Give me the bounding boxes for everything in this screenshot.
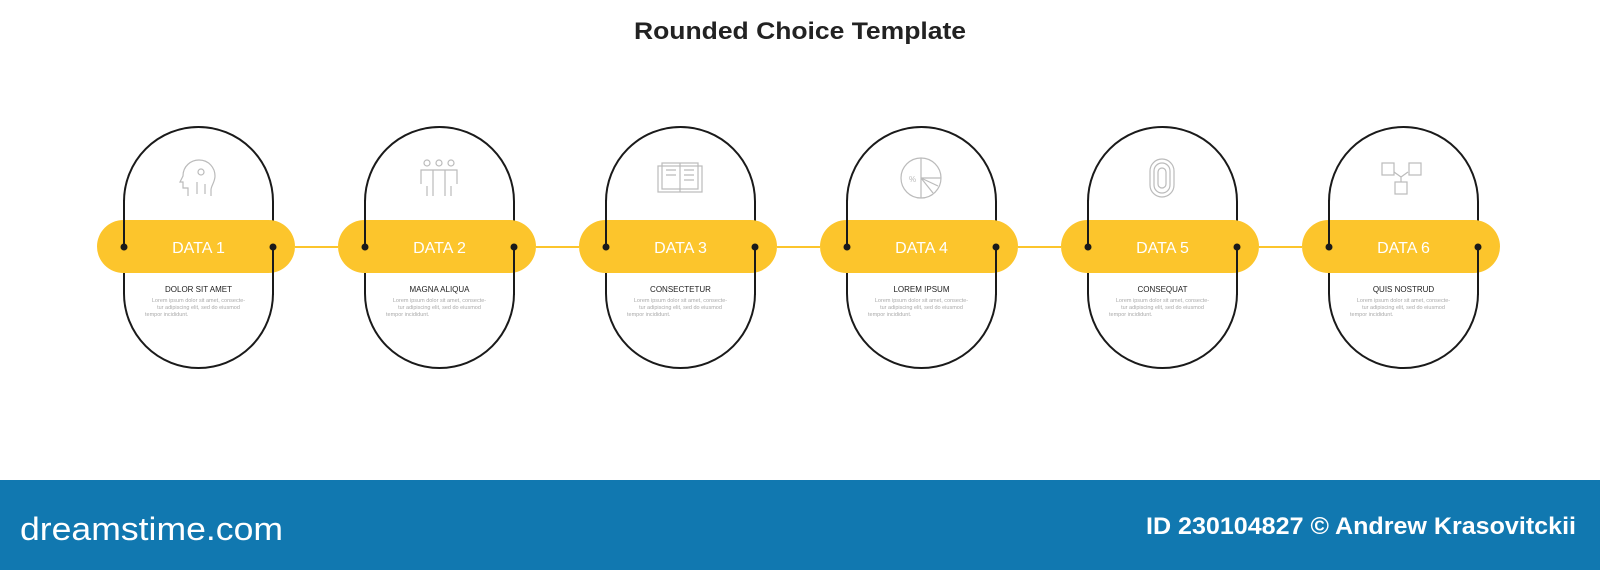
- icon: book: [658, 163, 702, 192]
- footer credit: ID 230104827 © Andrew Krasovitckii: [1146, 513, 1576, 540]
- step 4: [820, 127, 1018, 368]
- step 5: tempor incididunt.: [1109, 312, 1153, 318]
- step 3: tempor incididunt.: [627, 312, 671, 318]
- step 1: DATA 1: [172, 240, 225, 257]
- step 2: tempor incididunt.: [386, 312, 430, 318]
- step 2: Lorem ipsum dolor sit amet, consecte-: [393, 298, 486, 304]
- step 3: [579, 127, 777, 368]
- icon: fingerprint: [1150, 159, 1174, 197]
- step 5: CONSEQUAT: [1137, 285, 1188, 294]
- step 3: Lorem ipsum dolor sit amet, consecte-: [634, 298, 727, 304]
- step 1: [97, 127, 295, 368]
- step 3: CONSECTETUR: [650, 285, 711, 294]
- step 1: Lorem ipsum dolor sit amet, consecte-: [152, 298, 245, 304]
- step 5: Lorem ipsum dolor sit amet, consecte-: [1116, 298, 1209, 304]
- step 2: [338, 127, 536, 368]
- step 6: QUIS NOSTRUD: [1373, 285, 1434, 294]
- step 4: tempor incididunt.: [868, 312, 912, 318]
- step 6: tempor incididunt.: [1350, 312, 1394, 318]
- icon: cubes: [1382, 163, 1421, 194]
- step 6: Lorem ipsum dolor sit amet, consecte-: [1357, 298, 1450, 304]
- step 5: [1061, 127, 1259, 368]
- step 5: tur adipiscing elit, sed do eiusmod: [1121, 305, 1204, 311]
- step 4: LOREM IPSUM: [893, 285, 950, 294]
- step 3: tur adipiscing elit, sed do eiusmod: [639, 305, 722, 311]
- step 2: DATA 2: [413, 240, 466, 257]
- step 6: [1302, 127, 1500, 368]
- icon: people: [421, 160, 457, 196]
- step 2: MAGNA ALIQUA: [409, 285, 470, 294]
- step 4: Lorem ipsum dolor sit amet, consecte-: [875, 298, 968, 304]
- step 4: DATA 4: [895, 240, 948, 257]
- step 1: tur adipiscing elit, sed do eiusmod: [157, 305, 240, 311]
- step 4: tur adipiscing elit, sed do eiusmod: [880, 305, 963, 311]
- footer band: [0, 480, 1600, 570]
- step 6: DATA 6: [1377, 240, 1430, 257]
- connectors: [295, 246, 1302, 248]
- step 1: DOLOR SIT AMET: [165, 285, 232, 294]
- title: Rounded Choice Template: [634, 18, 966, 45]
- step 2: tur adipiscing elit, sed do eiusmod: [398, 305, 481, 311]
- icon: pie chart: [901, 158, 941, 198]
- step 3: DATA 3: [654, 240, 707, 257]
- step 5: DATA 5: [1136, 240, 1189, 257]
- step 1: tempor incididunt.: [145, 312, 189, 318]
- step 6: tur adipiscing elit, sed do eiusmod: [1362, 305, 1445, 311]
- icon: pie chart: %: [909, 175, 916, 184]
- icon: head: [180, 160, 215, 196]
- footer logo: dreamstime.com: [20, 511, 283, 547]
